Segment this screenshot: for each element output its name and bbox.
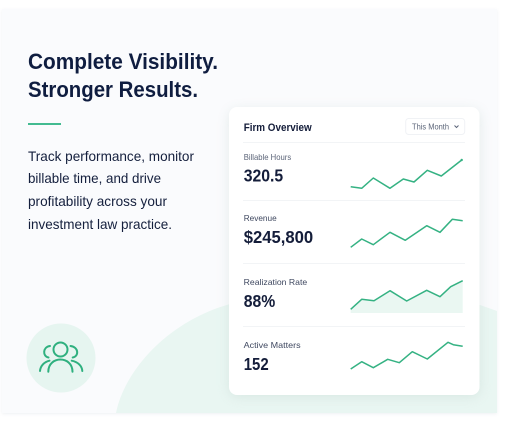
sparkline: active matters — [351, 342, 463, 369]
row: active matters: 152 — [244, 354, 269, 374]
text block: description: billable time, and drive — [28, 170, 161, 186]
row: revenue — [244, 213, 463, 247]
sparkline: billable hours — [351, 159, 463, 188]
row: revenue: $245,800 — [244, 227, 313, 247]
icon: people — [26, 324, 96, 392]
title: Stronger Results. — [28, 77, 198, 102]
area sparkline: realization rate — [351, 281, 463, 313]
card heading: Firm Overview — [244, 122, 312, 134]
row: realization rate: Realization Rate — [244, 277, 307, 287]
title: Complete Visibility. — [28, 49, 218, 74]
dropdown: this month: This Month — [412, 122, 449, 132]
row: billable hours — [244, 152, 463, 188]
panel: firm overview card — [229, 107, 480, 397]
row: billable hours: 320.5 — [244, 166, 283, 186]
title — [28, 49, 218, 102]
text block: description: profitability across your — [28, 193, 167, 209]
accent divider — [28, 123, 61, 125]
row: realization rate — [244, 277, 463, 313]
row: realization rate: 88% — [244, 291, 276, 311]
row: active matters: Active Matters — [244, 340, 301, 350]
row: revenue: Revenue — [244, 213, 277, 223]
sparkline: revenue — [351, 219, 463, 247]
text block: description: Track performance, monitor — [28, 148, 194, 164]
dropdown: this month — [406, 118, 465, 134]
text block: description — [28, 148, 194, 232]
row: billable hours: Billable Hours — [244, 152, 291, 162]
row: active matters — [244, 340, 463, 374]
text block: description: investment law practice. — [28, 216, 172, 232]
